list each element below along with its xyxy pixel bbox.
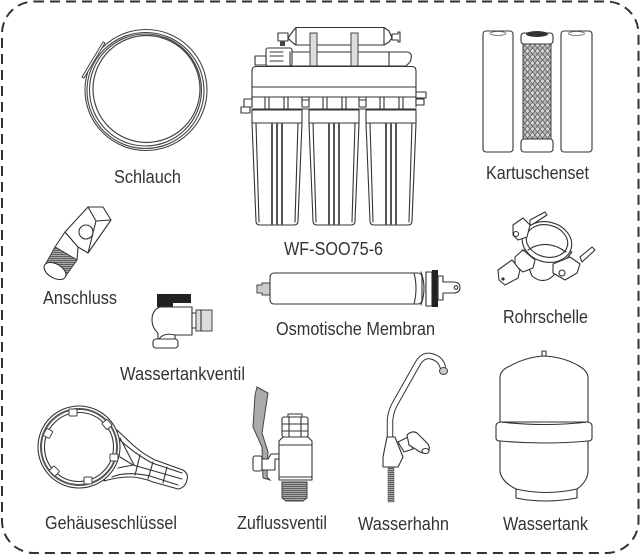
icon: housing wrench — [38, 406, 188, 489]
icon: tank valve — [152, 294, 212, 348]
left cartridge — [483, 31, 513, 152]
icon: connector fitting — [41, 207, 111, 283]
label: Wassertankventil: Wassertankventil — [120, 364, 245, 384]
icon: water tank — [496, 351, 592, 501]
label: Osmotische Membran: Osmotische Membran — [276, 319, 435, 339]
icon: filter unit WF-SOO75-6 — [241, 28, 426, 225]
clips — [310, 33, 358, 66]
label: Schlauch: Schlauch — [114, 167, 181, 187]
housing 2 — [309, 110, 359, 225]
right cartridge — [561, 31, 592, 152]
carbon cartridge — [521, 31, 553, 152]
icon: cartridge set — [483, 31, 592, 152]
icon: membrane — [257, 270, 460, 307]
label: Gehäuseschlüssel: Gehäuseschlüssel — [45, 513, 177, 533]
icon: tube coil — [82, 30, 207, 150]
label: WF-SOO75-6: WF-SOO75-6 — [284, 239, 383, 259]
second inline filter — [255, 48, 411, 66]
icon: faucet — [383, 356, 448, 502]
housing 1 — [252, 110, 302, 225]
label: Wassertank: Wassertank — [503, 514, 589, 534]
label: Anschluss: Anschluss — [43, 288, 117, 308]
connectors and side fittings — [241, 92, 426, 113]
label: Wasserhahn: Wasserhahn — [358, 514, 449, 534]
icon: inlet valve — [253, 387, 312, 501]
icon: pipe clamp — [498, 212, 595, 285]
housing 3 — [366, 110, 416, 225]
mounting plate — [252, 66, 416, 97]
top inline filter — [278, 28, 400, 46]
label: Zuflussventil: Zuflussventil — [237, 513, 327, 533]
label: Rohrschelle: Rohrschelle — [503, 307, 588, 327]
label: Kartuschenset: Kartuschenset — [486, 163, 589, 183]
